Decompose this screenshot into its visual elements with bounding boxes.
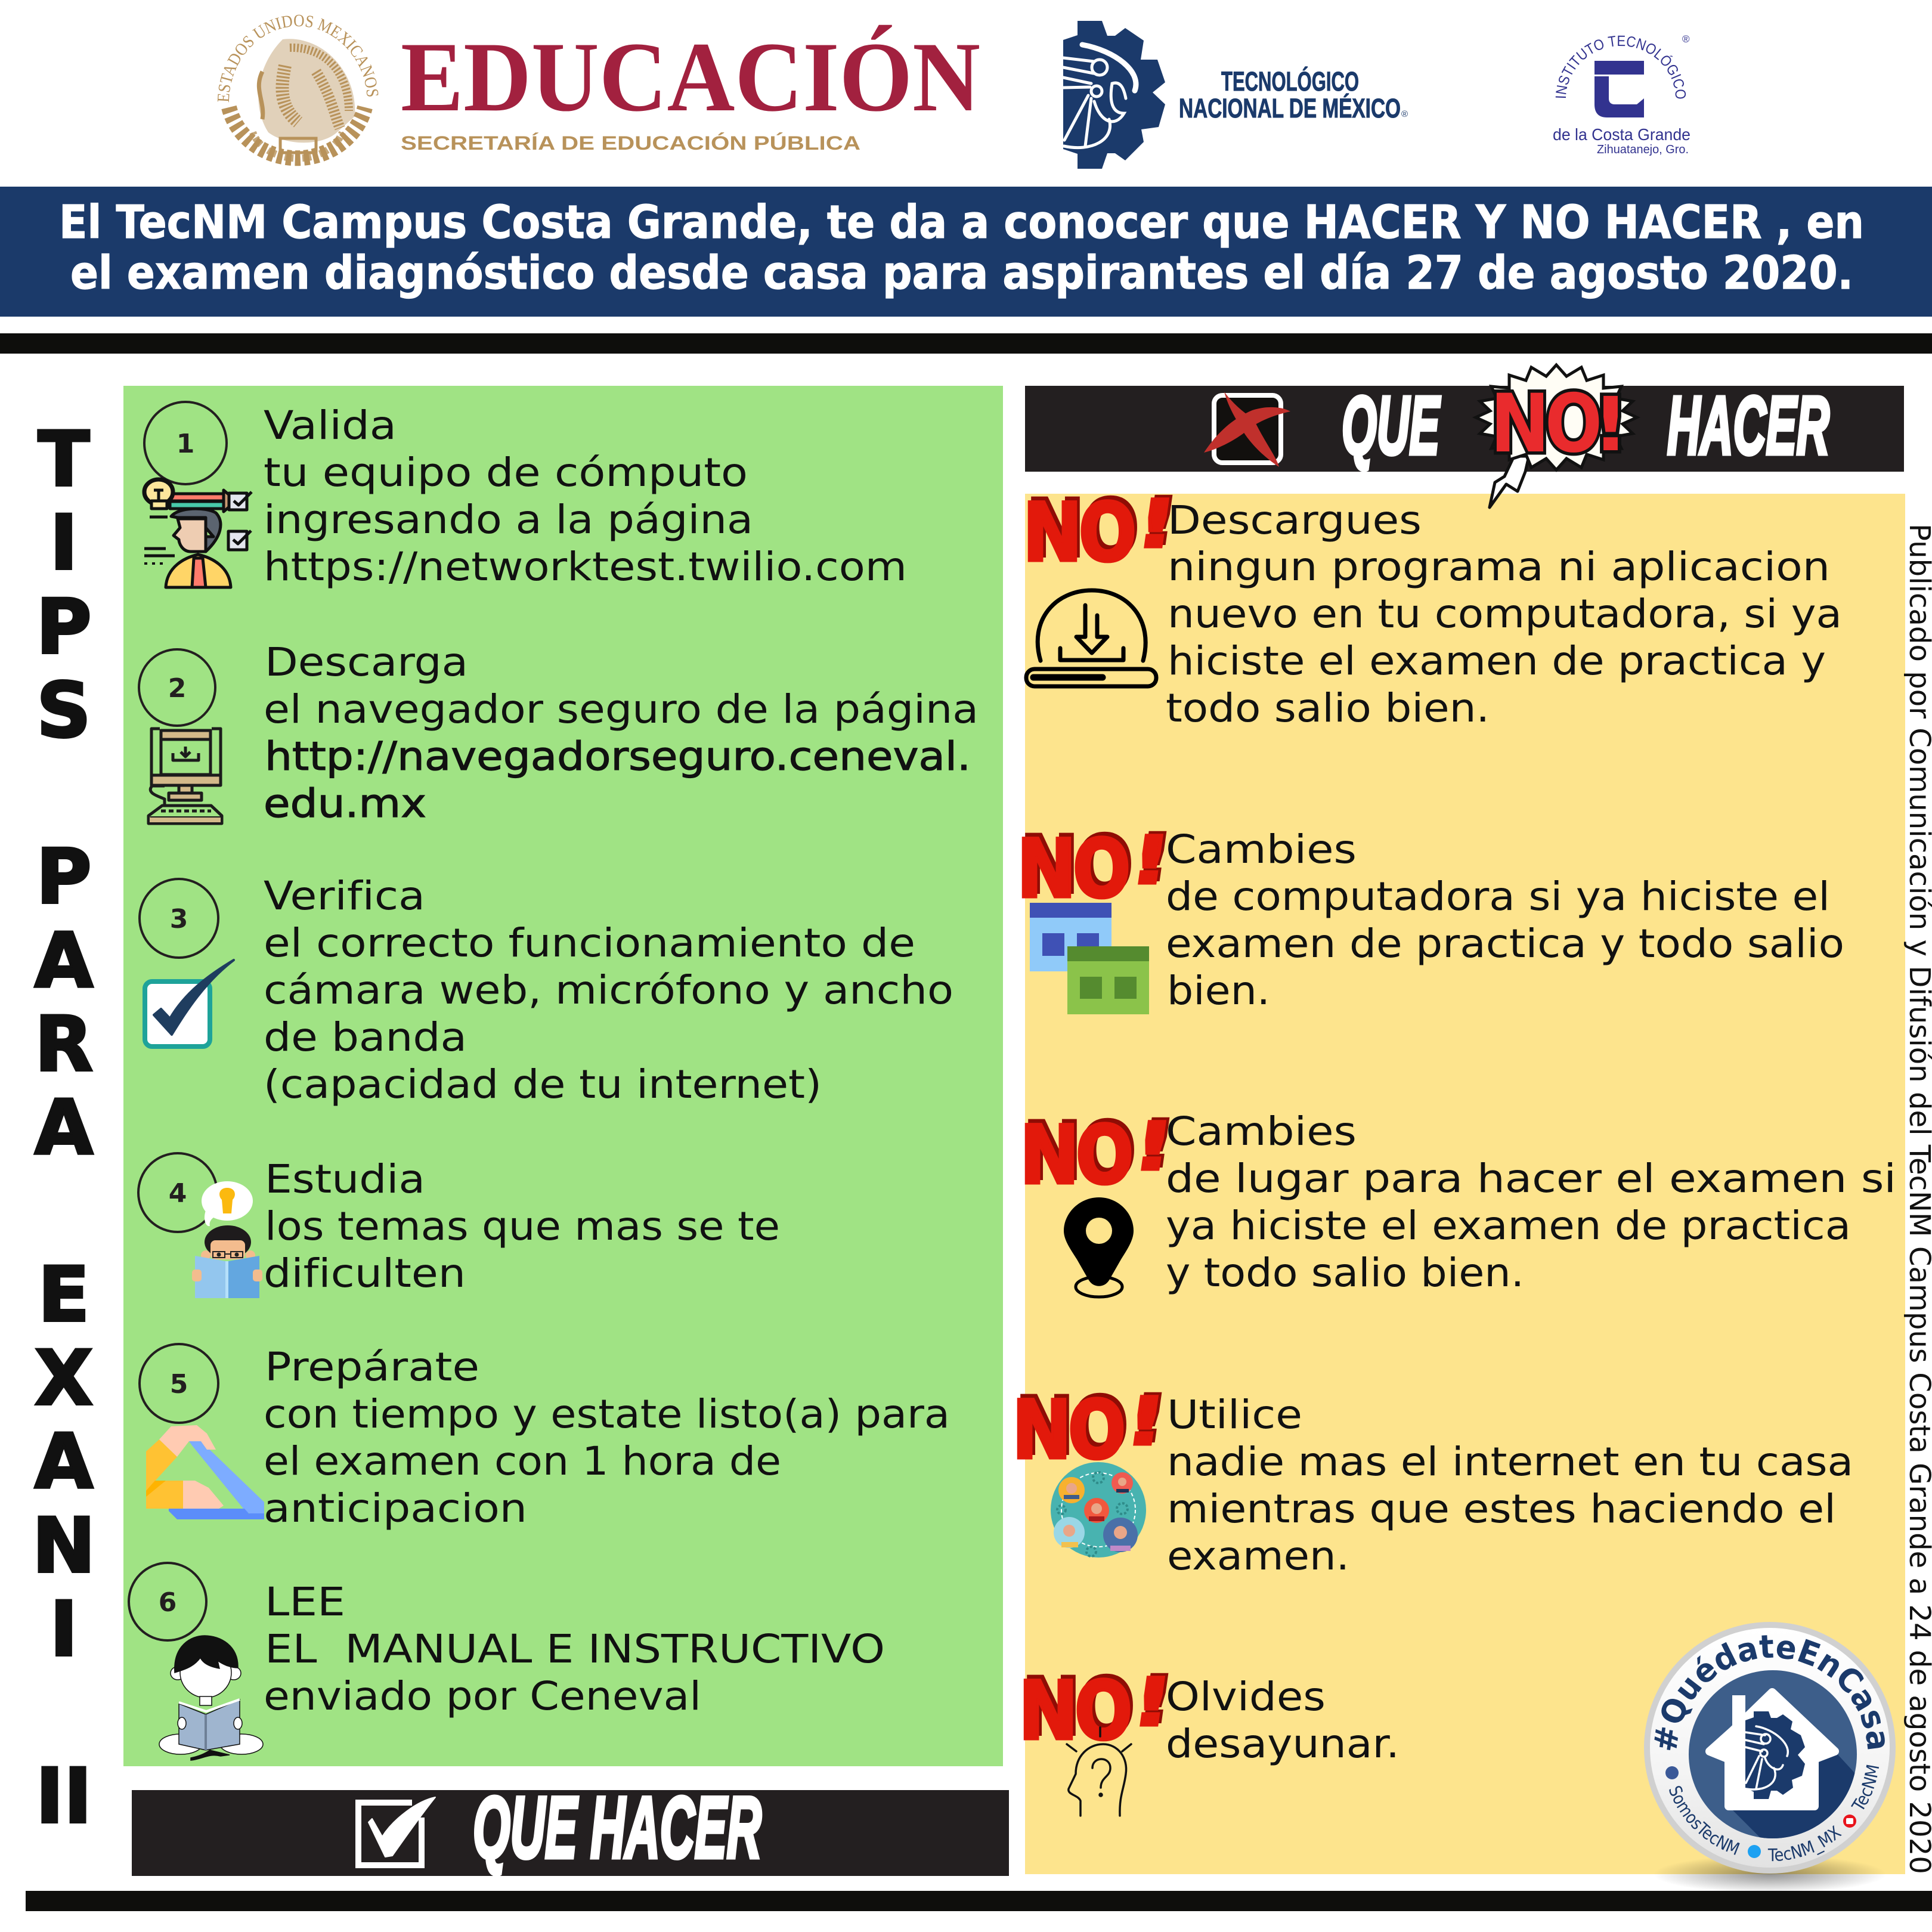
- icon: NO! sticker 1: [1023, 482, 1184, 580]
- logo: Instituto Tecnológico de la Costa Grande: ®: [1682, 33, 1690, 45]
- number 3: [140, 879, 218, 958]
- logo: Escudo Estados Unidos Mexicanos: [217, 14, 378, 166]
- text block: Cambies computadora: [1166, 826, 1844, 1014]
- text block: Cambies lugar: Cambies: [1166, 1109, 1357, 1154]
- header banner: [0, 187, 1932, 317]
- text block: Verifica: (capacidad de tu internet): [264, 1061, 822, 1107]
- logo: Instituto Tecnológico de la Costa Grande: INSTITUTO TECNOLÓGICO: [1555, 36, 1686, 99]
- text block: Utilice: nadie mas el internet en tu casa: [1167, 1439, 1853, 1485]
- icon: NO! sticker 5: O: [1075, 1664, 1132, 1758]
- icon: NO! sticker 2: N: [1020, 818, 1079, 912]
- vertical title: TIPS PARA EXANI II: A: [35, 917, 93, 1005]
- bottom black bar: [26, 1891, 1932, 1911]
- text block: Cambies lugar: de lugar para hacer el examen si: [1166, 1156, 1896, 1202]
- icon: NO! sticker 5: N: [1018, 1664, 1078, 1758]
- text block: Utilice: examen.: [1167, 1533, 1349, 1579]
- icon: NO! sticker 5: [1018, 1660, 1180, 1758]
- text block: Descarga: [264, 639, 979, 826]
- text block: LEE: [264, 1579, 885, 1719]
- number 6: 6: [159, 1587, 177, 1618]
- text block: Cambies computadora: examen de practica y todo salio: [1166, 921, 1844, 967]
- logo subtitle: Secretaría de Educación Pública: SECRETARÍA DE EDUCACIÓN PÚBLICA: [401, 132, 860, 154]
- badge shadow: [1654, 1855, 1886, 1893]
- text block: Descarga: edu.mx: [264, 781, 426, 826]
- logo text: Tecnológico Nacional de México: [1179, 66, 1408, 123]
- banner: QUE NO HACER: QUE: [1342, 380, 1441, 472]
- vertical title: TIPS PARA EXANI II: II: [36, 1752, 92, 1840]
- number 1: [144, 402, 227, 484]
- number 5: [140, 1344, 218, 1423]
- logo: Instituto Tecnológico de la Costa Grande: [1553, 33, 1690, 156]
- icon: NO! sticker 4: !: [1121, 1383, 1170, 1460]
- logo text: Tecnológico Nacional de México: NACIONAL DE MÉXICO: [1179, 93, 1401, 123]
- icon: download: [1026, 590, 1156, 686]
- logo: Instituto Tecnológico de la Costa Grande: Zihuatanejo, Gro.: [1597, 143, 1689, 156]
- text block: Verifica: [264, 873, 953, 1107]
- text block: Verifica: Verifica: [264, 873, 425, 919]
- vertical title: TIPS PARA EXANI II: P: [36, 583, 92, 671]
- text block: LEE: enviado por Ceneval: [264, 1673, 701, 1719]
- vertical title: TIPS PARA EXANI II: I: [49, 1585, 78, 1673]
- panel: que hacer (green): [123, 386, 1003, 1766]
- logo: Instituto Tecnológico de la Costa Grande: de la Costa Grande: [1553, 125, 1690, 144]
- panel: que no hacer (yellow): [1025, 494, 1905, 1874]
- icon: people network: [1051, 1462, 1146, 1558]
- badge: #QuédateEnCasa: #QuédateEnCasa: [1654, 1635, 1885, 1750]
- badge: #QuédateEnCasa: TecNM: [1851, 1765, 1880, 1809]
- vertical title: TIPS PARA EXANI II: I: [49, 499, 78, 587]
- number 1: 1: [177, 429, 194, 459]
- icon: NO! sticker 4: [1012, 1379, 1174, 1477]
- text block: Descargues: ningun programa ni aplicacion: [1168, 544, 1830, 590]
- icon: NO! sticker 5: !: [1128, 1664, 1176, 1741]
- banner: QUE HACER: QUE HACER: [473, 1779, 761, 1876]
- vertical title: TIPS PARA EXANI II: E: [38, 1250, 89, 1339]
- icon: NO! sticker 1: O: [1082, 482, 1140, 575]
- icon: NO! sticker 1: N: [1026, 482, 1085, 575]
- icon: NO! sticker 2: !: [1126, 822, 1175, 899]
- vertical title: TIPS PARA EXANI II: R: [35, 1000, 93, 1088]
- number 4: 4: [169, 1178, 187, 1209]
- icon: NO! comic burst: !: [1592, 382, 1629, 468]
- text block: Utilice: mientras que estes haciendo el: [1167, 1486, 1836, 1532]
- text block: Descarga: http://navegadorseguro.ceneval.: [265, 733, 971, 779]
- icon: check mark box: [358, 1797, 435, 1865]
- text block: Valida: ingresando a la página: [264, 497, 753, 543]
- text block: Descarga: Descarga: [265, 639, 468, 685]
- text block: Verifica: el correcto funcionamiento de: [264, 920, 915, 966]
- badge: #QuédateEnCasa: [1644, 1622, 1896, 1874]
- text block: Utilice: [1167, 1392, 1853, 1579]
- icon: NO! sticker 3: [1020, 1104, 1181, 1202]
- number 5: 5: [170, 1369, 188, 1400]
- text block: Descargues: hiciste el examen de practica y: [1168, 638, 1826, 684]
- text block: Prepárate: el examen con 1 hora de: [264, 1438, 781, 1484]
- icon: NO! sticker 1: !: [1135, 483, 1184, 560]
- text block: Valida: Valida: [264, 402, 397, 448]
- icon: two computers windows: [1030, 903, 1149, 1014]
- number 6: [129, 1563, 206, 1640]
- icon: NO! sticker 2: N: [1017, 822, 1076, 916]
- icon: NO! sticker 3: N: [1020, 1109, 1079, 1202]
- icon: head with question mark: [1067, 1727, 1131, 1816]
- banner: QUE NO HACER: [1025, 380, 1904, 472]
- icon: child reading: [159, 1636, 263, 1760]
- text block: Cambies lugar: ya hiciste el examen de practica: [1166, 1203, 1851, 1249]
- icon: NO! sticker 3: !: [1129, 1109, 1178, 1185]
- text block: Cambies lugar: y todo salio bien.: [1166, 1250, 1524, 1296]
- number 2: [139, 649, 215, 726]
- icon: NO! sticker 4: !: [1125, 1380, 1174, 1457]
- number 3: 3: [170, 904, 188, 934]
- text block: Descargues: todo salio bien.: [1166, 685, 1490, 731]
- icon: NO! sticker 5: O: [1078, 1660, 1135, 1754]
- icon: NO! sticker 1: !: [1132, 486, 1181, 563]
- icon: NO! comic burst: O: [1545, 377, 1602, 470]
- text block: Descargues: nuevo en tu computadora, si ya: [1168, 591, 1842, 637]
- vertical title: TIPS PARA EXANI II: A: [35, 1417, 93, 1506]
- banner: QUE HACER: [132, 1779, 1009, 1876]
- icon: NO! sticker 1: O: [1079, 486, 1137, 580]
- logo text: Tecnológico Nacional de México: TECNOLÓGICO: [1221, 66, 1359, 97]
- icon: crossed box: [1204, 392, 1290, 467]
- number 2: 2: [168, 673, 186, 704]
- icon: person with pencil and checks: [144, 479, 252, 587]
- top black bar: [0, 333, 1932, 354]
- text block: Olvides: desayunar.: [1166, 1721, 1400, 1767]
- icon: NO! sticker 1: N: [1023, 486, 1082, 580]
- text block: Valida: tu equipo de cómputo: [264, 450, 748, 496]
- icon: NO! sticker 3: N: [1023, 1104, 1082, 1198]
- text block: Estudia: los temas que mas se te: [265, 1203, 780, 1249]
- vertical title: TIPS PARA EXANI II: X: [35, 1334, 93, 1422]
- text block: Olvides: [1166, 1674, 1400, 1767]
- badge: #QuédateEnCasa: SomosTecNM: [1669, 1786, 1740, 1855]
- text block: Verifica: cámara web, micrófono y ancho: [264, 967, 953, 1013]
- logo text: Tecnológico Nacional de México: ®: [1401, 109, 1408, 119]
- text block: Olvides: Olvides: [1166, 1674, 1326, 1720]
- text block: Prepárate: [264, 1344, 950, 1531]
- text block: Prepárate: con tiempo y estate listo(a) para: [264, 1391, 950, 1437]
- logo: engrane TecNM: [1063, 21, 1165, 169]
- text block: Cambies lugar: [1166, 1109, 1896, 1296]
- text block: Cambies computadora: bien.: [1167, 968, 1270, 1014]
- icon: location pin: [1064, 1197, 1134, 1297]
- text block: LEE: LEE: [265, 1579, 345, 1625]
- text block: Descarga: el navegador seguro de la página: [264, 686, 979, 732]
- text block: Cambies computadora: Cambies: [1166, 826, 1357, 872]
- text block: Prepárate: Prepárate: [265, 1344, 479, 1390]
- icon: NO! sticker 2: O: [1076, 818, 1134, 912]
- icon: checkbox: [145, 960, 234, 1046]
- text block: Descargues: Descargues: [1168, 497, 1422, 543]
- text block: Prepárate: anticipacion: [264, 1485, 527, 1531]
- vertical title: TIPS PARA EXANI II: [32, 415, 95, 1840]
- icon: NO! sticker 5: N: [1021, 1660, 1081, 1754]
- text block: Utilice: Utilice: [1167, 1392, 1302, 1438]
- icon: NO! sticker 4: N: [1012, 1383, 1072, 1477]
- icon: NO! comic burst: N: [1490, 377, 1550, 470]
- text block: Estudia: dificulten: [264, 1250, 466, 1296]
- icon: NO! sticker 4: N: [1015, 1379, 1075, 1473]
- logo: Escudo Estados Unidos Mexicanos: ESTADOS UNIDOS MEXICANOS: [217, 14, 378, 103]
- vertical title: TIPS PARA EXANI II: S: [36, 666, 91, 754]
- logo title: EDUCACIÓN: EDUCACIÓN: [401, 22, 980, 132]
- icon: NO! comic burst: [1476, 365, 1637, 507]
- vertical title: TIPS PARA EXANI II: A: [35, 1083, 93, 1172]
- vertical title: TIPS PARA EXANI II: T: [38, 415, 89, 503]
- icon: hands on laptop: [146, 1425, 264, 1519]
- icon: NO! sticker 5: !: [1131, 1661, 1180, 1738]
- number 4: [138, 1153, 217, 1232]
- icon: NO! sticker 3: O: [1079, 1104, 1137, 1198]
- icon: TecNM gear in house: [1745, 1711, 1805, 1799]
- text block: Verifica: de banda: [264, 1014, 467, 1060]
- icon: student reading with idea: [192, 1181, 262, 1298]
- vertical title: TIPS PARA EXANI II: N: [32, 1501, 95, 1590]
- text block: Valida: [264, 402, 907, 590]
- badge: #QuédateEnCasa: TecNM_MX: [1767, 1825, 1842, 1862]
- icon: NO! sticker 2: O: [1073, 822, 1131, 916]
- icon: NO! sticker 4: O: [1068, 1383, 1126, 1477]
- icon: NO! sticker 2: !: [1129, 819, 1178, 896]
- text block: Cambies computadora: de computadora si ya hiciste el: [1166, 874, 1830, 919]
- icon: NO! sticker 2: [1017, 818, 1178, 916]
- text block: Valida: https://networktest.twilio.com: [264, 544, 907, 590]
- text block: LEE: EL MANUAL E INSTRUCTIVO: [265, 1626, 885, 1672]
- text block: Estudia: [264, 1156, 780, 1296]
- icon: computer download: [148, 729, 222, 823]
- icon: NO! sticker 4: O: [1071, 1379, 1129, 1473]
- icon: NO! sticker 3: O: [1076, 1109, 1134, 1202]
- text block: Descargues: [1166, 497, 1842, 731]
- icon: NO! sticker 3: !: [1132, 1106, 1181, 1182]
- vertical title: TIPS PARA EXANI II: P: [36, 832, 92, 921]
- text block: Estudia: Estudia: [265, 1156, 425, 1202]
